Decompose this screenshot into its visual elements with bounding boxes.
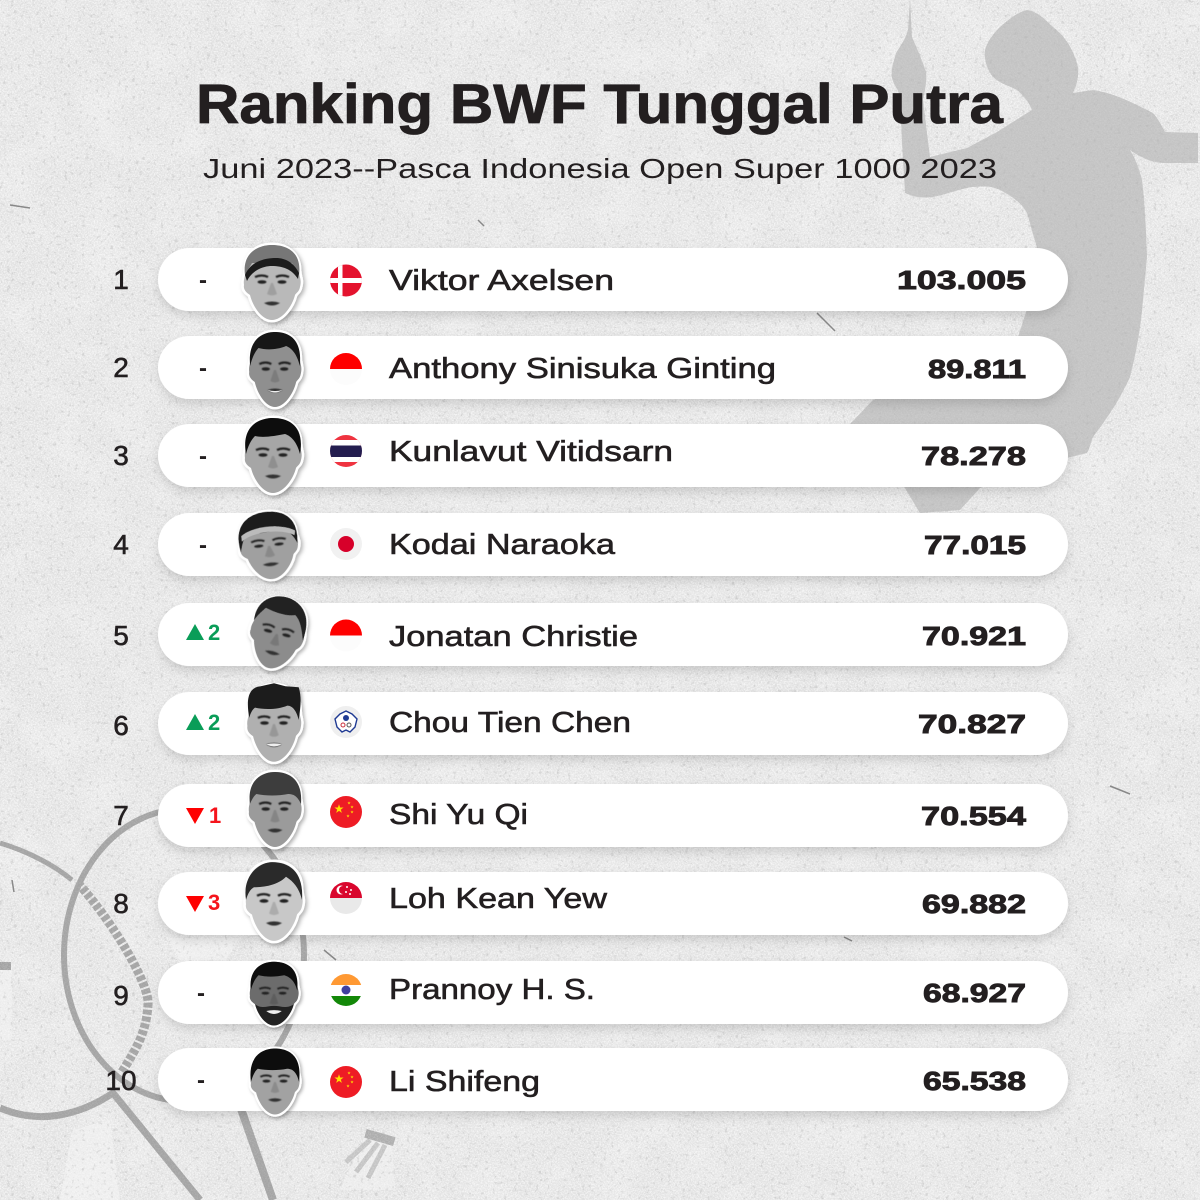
rank change: - [197, 1067, 205, 1094]
row 3 [113, 418, 1068, 493]
rank change: - [199, 355, 207, 382]
points: 77.015 [924, 530, 1026, 560]
rank number: 5 [113, 620, 129, 651]
rank change: - [199, 267, 207, 294]
subtitle: Juni 2023--Pasca Indonesia Open Super 1000 2023 [203, 153, 997, 184]
player name: Prannoy H. S. [389, 974, 595, 1006]
paper specks [10, 205, 1130, 960]
player name: Kunlavut Vitidsarn [389, 436, 673, 468]
row pill [158, 248, 1068, 311]
row 1 [113, 245, 1068, 320]
portrait: Anthony Sinisuka Ginting [249, 332, 301, 407]
row 6 [113, 683, 1068, 762]
row pill [158, 872, 1068, 935]
row pill [158, 784, 1068, 847]
rank change: - [197, 980, 205, 1007]
title: Ranking BWF Tunggal Putra [196, 72, 1004, 135]
player name: Shi Yu Qi [389, 799, 528, 831]
points: 70.827 [918, 709, 1026, 739]
points: 70.921 [922, 621, 1026, 651]
rank number: 8 [113, 888, 129, 919]
row 4 [113, 509, 1068, 582]
row pill [158, 424, 1068, 487]
flag: Chinese Taipei [330, 706, 362, 738]
player name: Loh Kean Yew [389, 883, 608, 915]
row 9 [113, 961, 1068, 1025]
rank change [186, 710, 220, 735]
player name: Li Shifeng [389, 1066, 540, 1098]
portrait: Li Shifeng [250, 1049, 300, 1115]
points: 69.882 [922, 889, 1026, 919]
row 10 [105, 1048, 1068, 1115]
rank change: - [199, 532, 207, 559]
rank change [186, 803, 221, 828]
row pill [158, 692, 1068, 755]
rank change [186, 890, 220, 915]
row pill [158, 961, 1068, 1024]
row pill [158, 513, 1068, 576]
flag: Indonesia [330, 620, 362, 652]
flag: Japan [330, 528, 362, 560]
points: 68.927 [923, 978, 1026, 1008]
racket outline behind rows [0, 809, 304, 1200]
row 7 [113, 772, 1068, 847]
rank change: 1 [209, 803, 221, 828]
row pill [158, 336, 1068, 399]
rank number: 10 [105, 1065, 137, 1096]
points: 103.005 [897, 265, 1026, 295]
rank change [186, 620, 220, 645]
rank number: 6 [113, 710, 129, 741]
player name: Viktor Axelsen [389, 265, 614, 297]
rank number: 4 [113, 529, 129, 560]
portrait: Loh Kean Yew [245, 862, 303, 941]
rank number: 9 [113, 980, 129, 1011]
rank change: 2 [208, 710, 220, 735]
shuttlecocks [0, 938, 396, 1200]
flag: India [330, 974, 362, 1007]
player name: Kodai Naraoka [389, 529, 616, 561]
flag: Singapore [330, 882, 362, 914]
flag: Thailand [330, 435, 362, 467]
rank number: 3 [113, 440, 129, 471]
row 5 [113, 591, 1068, 675]
rank number: 7 [113, 800, 129, 831]
row pill [158, 603, 1068, 666]
rank number: 2 [113, 352, 129, 383]
row 2 [113, 332, 1068, 407]
portrait: Kodai Naraoka [236, 509, 302, 582]
flag: China [330, 1066, 362, 1098]
portrait: Kunlavut Vitidsarn [245, 418, 302, 493]
rank change: 3 [208, 890, 220, 915]
points: 65.538 [923, 1066, 1026, 1096]
points: 78.278 [921, 441, 1026, 471]
rank change: - [199, 443, 207, 470]
portrait: Chou Tien Chen [247, 683, 301, 762]
player silhouette [850, 0, 1198, 513]
row pill [158, 1048, 1068, 1111]
portrait: Prannoy H. S. [250, 962, 299, 1025]
flag: China [330, 796, 362, 828]
player name: Jonatan Christie [389, 621, 638, 653]
player name: Anthony Sinisuka Ginting [389, 353, 776, 385]
points: 89.811 [928, 354, 1026, 384]
rank number: 1 [113, 264, 129, 295]
portrait: Shi Yu Qi [249, 772, 302, 847]
portrait: Viktor Axelsen [244, 245, 301, 320]
player name: Chou Tien Chen [389, 707, 631, 739]
row 8 [113, 862, 1068, 941]
flag: Indonesia [330, 353, 362, 385]
portrait: Jonatan Christie [242, 591, 313, 675]
rank change: 2 [208, 620, 220, 645]
points: 70.554 [921, 801, 1027, 831]
flag: Denmark [330, 264, 362, 297]
